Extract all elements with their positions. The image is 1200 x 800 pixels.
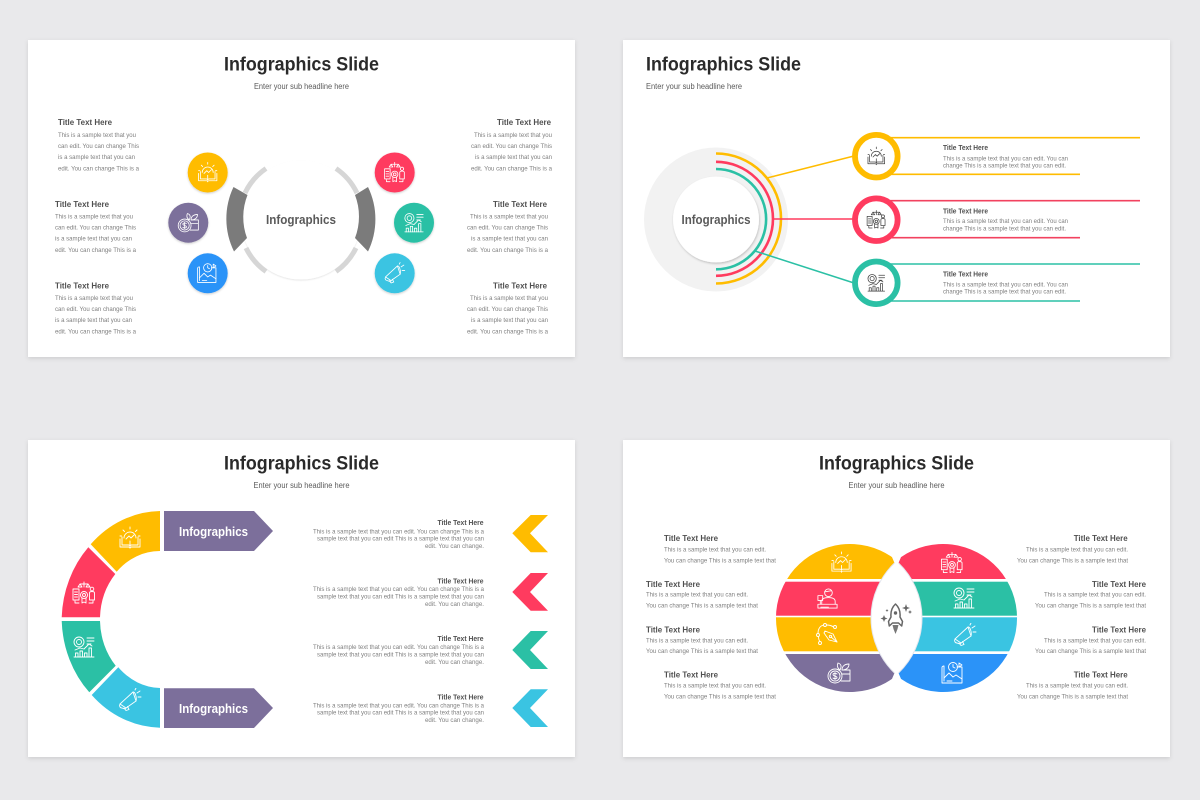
text block right 2: You can change This is a sample text that [1035, 603, 1146, 610]
text block 4: Title Text Here [438, 692, 484, 702]
text block left 2: edit. You can change This is a [55, 247, 137, 254]
text block right 2: edit. You can change This is a [467, 247, 549, 254]
text block 1: Title Text Here [438, 518, 484, 527]
text block right 3: This is a sample text that you can edit. [1044, 637, 1146, 644]
text block left 1: can edit. You can change This [58, 143, 139, 150]
text block right 3: edit. You can change This is a [467, 328, 549, 336]
text block right 1: edit. You can change This is a [471, 166, 553, 172]
text block left 1: This is a sample text that you [58, 132, 137, 139]
text block 1: sample text that you can edit This is a sample text that you can [317, 536, 485, 543]
sub headline: Enter your sub headline here [254, 481, 350, 490]
text block left 1: Title Text Here [58, 117, 112, 127]
text block 4 [313, 692, 485, 724]
panel: venn slide [623, 440, 1170, 757]
panel: concentric lines slide [623, 40, 1170, 357]
text block right 2: This is a sample text that you [470, 214, 549, 220]
text block right 3: can edit. You can change This [467, 306, 548, 313]
text block right 1: You can change This is a sample text that [1017, 557, 1128, 564]
venn left half [776, 544, 894, 692]
sub headline: Enter your sub headline here [254, 82, 350, 91]
text block right 2: can edit. You can change This [467, 224, 548, 232]
text block left 3: Title Text Here [646, 624, 700, 634]
text block 4: This is a sample text that you can edit. You can change This is a [313, 702, 485, 709]
text block right 4 [1017, 670, 1128, 701]
concentric hub [644, 148, 788, 292]
row 1: yellow [855, 135, 1140, 178]
text block 2: sample text that you can edit This is a sample text that you can [317, 594, 485, 600]
text block left 4: This is a sample text that you can edit. [664, 682, 766, 690]
text block right 2: Title Text Here [493, 199, 547, 209]
row 2: red: This is a sample text that you can edit. You can [943, 218, 1069, 225]
text block right 2: This is a sample text that you can edit. [1044, 592, 1146, 599]
chevron teal [512, 631, 548, 669]
text block right 1: is a sample text that you can [475, 154, 553, 161]
text block 1 [313, 518, 485, 550]
text block 3: edit. You can change. [425, 659, 484, 666]
text block 3 [313, 634, 485, 666]
concentric hub: Infographics [682, 213, 751, 227]
row 1: yellow: Title Text Here [943, 143, 988, 152]
text block right 3: is a sample text that you can [471, 317, 549, 324]
text block left 1: is a sample text that you can [58, 154, 136, 161]
text block right 3 [1035, 624, 1146, 655]
arrow label top [164, 511, 273, 551]
text block left 3: is a sample text that you can [55, 317, 133, 324]
text block 2: Title Text Here [438, 576, 484, 586]
sub headline: Enter your sub headline here [646, 82, 743, 91]
row 2: red [855, 198, 1140, 241]
text block right 3: Title Text Here [1092, 624, 1146, 634]
text block 4: edit. You can change. [425, 717, 484, 724]
arrow label bottom: Infographics [179, 701, 248, 716]
row 1: yellow: This is a sample text that you can edit. You can [943, 155, 1069, 162]
icon circle: teal chart [394, 203, 434, 243]
text block 1: This is a sample text that you can edit. You can change This is a [313, 528, 485, 535]
segment: cyan [92, 667, 160, 728]
central circle with arcs: Infographics [266, 213, 336, 227]
text block right 4: You can change This is a sample text that [1017, 694, 1128, 701]
text block left 2: This is a sample text that you can edit. [646, 592, 748, 599]
text block left 2: can edit. You can change This [55, 224, 136, 232]
text block 3: This is a sample text that you can edit. You can change This is a [313, 644, 485, 651]
heading: Infographics Slide [819, 452, 974, 474]
text block left 1 [58, 117, 140, 172]
icon circle: blue map [188, 253, 228, 293]
connector: red [772, 218, 854, 220]
text block right 2 [1035, 579, 1146, 610]
text block right 2 [467, 199, 549, 254]
text block right 1 [1017, 533, 1128, 564]
row 3: teal: This is a sample text that you can edit. You can [943, 282, 1069, 289]
icon circle: red award [375, 152, 415, 192]
icon circle: purple coin [168, 203, 208, 243]
text block right 1 [471, 117, 553, 172]
text block left 3 [646, 624, 758, 655]
text block left 1: edit. You can change This is a [58, 166, 140, 172]
text block left 1: This is a sample text that you can edit. [664, 546, 766, 553]
icon: rocket [880, 604, 912, 634]
text block right 3 [467, 280, 549, 336]
text block left 2: This is a sample text that you [55, 214, 134, 220]
text block right 1: Title Text Here [1074, 533, 1128, 543]
row 2: red: Title Text Here [943, 206, 988, 216]
chevron red [512, 573, 548, 611]
text block left 3 [55, 280, 137, 336]
text block right 2: is a sample text that you can [471, 236, 549, 242]
text block right 1: Title Text Here [497, 117, 551, 127]
row 2: red: change This is a sample text that you can edit. [943, 225, 1066, 232]
text block 3: sample text that you can edit This is a sample text that you can [317, 652, 485, 658]
text block right 1: This is a sample text that you can edit. [1026, 546, 1128, 553]
heading: Infographics Slide [224, 54, 379, 76]
text block right 1: This is a sample text that you [474, 132, 553, 139]
central circle with arcs [226, 160, 375, 280]
panel: radial arc slide [28, 40, 575, 357]
text block left 4: Title Text Here [664, 670, 718, 680]
connector: teal [755, 251, 854, 283]
segment: yellow [91, 511, 160, 572]
text block left 2 [55, 199, 137, 254]
text block left 1: You can change This is a sample text that [664, 557, 776, 564]
row 3: teal: Title Text Here [943, 270, 988, 278]
text block right 3: You can change This is a sample text that [1035, 648, 1146, 655]
arrow label bottom [164, 688, 273, 728]
text block left 3: This is a sample text that you can edit. [646, 637, 748, 644]
text block right 3: This is a sample text that you [470, 295, 549, 302]
heading: Infographics Slide [646, 54, 801, 76]
text block 2: edit. You can change. [425, 601, 484, 608]
row 1: yellow: change This is a sample text that you can edit. [943, 162, 1066, 169]
text block left 2: Title Text Here [55, 199, 109, 209]
text block left 3: You can change This is a sample text that [646, 648, 758, 655]
text block 2 [313, 576, 485, 608]
text block 1: edit. You can change. [425, 543, 484, 550]
row 3: teal: change This is a sample text that you can edit. [943, 289, 1066, 296]
text block right 4: Title Text Here [1074, 670, 1128, 680]
text block right 3: Title Text Here [493, 280, 547, 290]
icon circle: cyan megaphone [375, 253, 415, 293]
chevron cyan [512, 689, 548, 727]
text block left 4 [664, 670, 776, 701]
panel: C-shape slide [28, 440, 575, 757]
row 3: teal [855, 262, 1140, 304]
text block left 3: can edit. You can change This [55, 306, 136, 313]
icon circle: yellow book [188, 152, 228, 192]
connector: yellow [767, 156, 854, 178]
text block left 2: You can change This is a sample text that [646, 603, 758, 610]
text block left 2 [646, 579, 758, 610]
chevron yellow [512, 515, 548, 552]
venn right half [898, 544, 1018, 692]
text block left 3: edit. You can change This is a [55, 328, 137, 336]
text block left 1: Title Text Here [664, 533, 718, 543]
text block left 2: Title Text Here [646, 579, 700, 589]
text block left 4: You can change This is a sample text that [664, 694, 776, 701]
lens edge [871, 563, 922, 673]
text block 3: Title Text Here [438, 634, 484, 643]
segment: red [62, 547, 115, 617]
text block right 2: Title Text Here [1092, 579, 1146, 589]
text block 2: This is a sample text that you can edit. You can change This is a [313, 586, 485, 593]
text block left 3: Title Text Here [55, 280, 109, 290]
heading: Infographics Slide [224, 452, 379, 474]
sub headline: Enter your sub headline here [848, 481, 945, 490]
text block 4: sample text that you can edit This is a sample text that you can [317, 710, 485, 717]
text block left 3: This is a sample text that you [55, 295, 134, 302]
text block left 1 [664, 533, 776, 564]
text block right 4: This is a sample text that you can edit. [1026, 682, 1128, 690]
arrow label top: Infographics [179, 524, 248, 539]
text block right 1: can edit. You can change This [471, 143, 552, 150]
text block left 2: is a sample text that you can [55, 236, 133, 242]
segment: teal [62, 621, 116, 692]
